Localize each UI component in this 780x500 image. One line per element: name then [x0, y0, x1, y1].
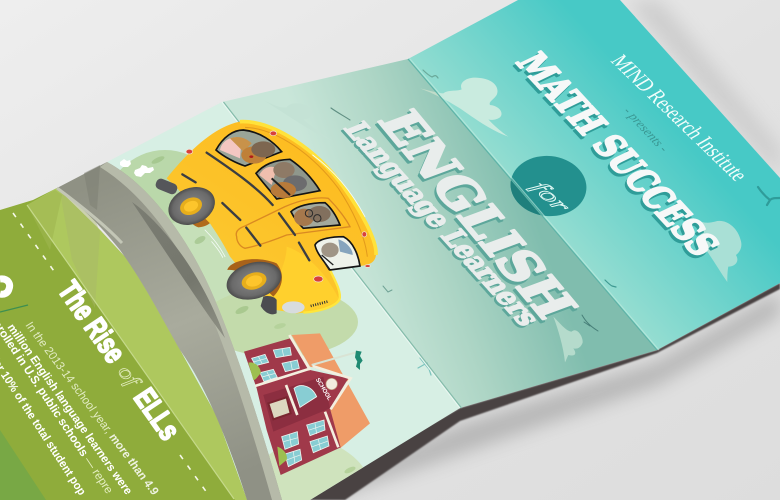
- illustration: school bus: [154, 122, 376, 314]
- motion lines: [205, 155, 365, 257]
- subheading shadow: Language Learners: [334, 120, 545, 332]
- large numeral fragment: [0, 279, 10, 294]
- green lower-left tone: [0, 430, 46, 500]
- school clock: [326, 378, 337, 390]
- school windows: [252, 347, 329, 467]
- fold lines: [222, 59, 659, 408]
- window 3: [291, 203, 340, 228]
- panel: green inside page: [0, 182, 247, 500]
- red lights: [186, 131, 370, 282]
- badge shaded part: [510, 180, 541, 216]
- white flowers: [120, 159, 154, 177]
- green light band: [27, 188, 247, 500]
- headlight: [282, 301, 305, 313]
- rule: [0, 305, 28, 312]
- subheading: Language Learners: [334, 118, 547, 332]
- top rim highlight: [240, 122, 376, 255]
- panel background: [107, 102, 460, 500]
- fold line: [27, 205, 234, 499]
- road: [57, 162, 282, 500]
- panel: left cover scene: [103, 102, 460, 500]
- hills: [120, 150, 364, 500]
- hood highlight: [267, 247, 339, 313]
- window 2: [256, 159, 320, 199]
- birds: [331, 70, 780, 375]
- paper shadow: [300, 0, 780, 495]
- paragraph: [0, 313, 161, 498]
- heading: MATH SUCCESS: [504, 47, 728, 265]
- circle badge: for: [510, 156, 586, 216]
- school trim: [255, 335, 351, 447]
- heading part: of: of: [113, 360, 147, 393]
- panel: middle title panel: [222, 59, 657, 408]
- school sign: SCHOOL: [314, 377, 332, 402]
- school bushes: [248, 362, 287, 466]
- road outer kerb: [100, 162, 282, 500]
- rear wheel: [163, 180, 221, 232]
- heading face: ENGLISH: [366, 103, 589, 325]
- road inner highlight: [57, 188, 122, 243]
- road surface: [57, 162, 282, 500]
- heading shadow: ENGLISH: [364, 106, 587, 328]
- grille: [311, 301, 329, 306]
- rear wheel arch: [180, 189, 217, 227]
- windshield: [315, 237, 360, 270]
- front wheel arch: [227, 259, 282, 297]
- heading part: The Rise: The Rise: [51, 275, 132, 369]
- line 1: In the 2013-14 school year, more than 4.9: [22, 320, 161, 497]
- cloud: fold shadowed part: [420, 88, 440, 97]
- side slats: [182, 153, 309, 260]
- road reflection stripes: [60, 182, 100, 308]
- text: presents: - presents -: [620, 105, 672, 154]
- cloud: lower middle: [553, 317, 583, 362]
- school window grids: [253, 349, 328, 463]
- school door: [268, 397, 291, 419]
- heading shadow: MATH SUCCESS: [504, 50, 726, 265]
- door outline: [236, 198, 350, 248]
- school flag: [312, 351, 363, 370]
- heading: MIND Research Institute: MIND Research Institute: [605, 52, 753, 185]
- badge disc: [508, 152, 589, 220]
- panel: right title panel: [408, 0, 780, 350]
- heading part: ELLs: ELLs: [127, 383, 187, 446]
- bus body: [167, 122, 376, 313]
- heading: The Rise of ELLs: [51, 275, 187, 446]
- line 2: million English language learners were: [4, 322, 134, 497]
- school lower band: [263, 377, 330, 432]
- badge script: for: [525, 179, 576, 216]
- heading face: MATH SUCCESS: [506, 47, 728, 262]
- road crescent: [132, 202, 225, 338]
- window 1: [216, 130, 282, 166]
- school roof: [292, 333, 370, 448]
- front wheel: [222, 256, 286, 306]
- road shaded stripe: [84, 165, 100, 210]
- illustration: school: [244, 333, 370, 475]
- roof trim: [245, 127, 367, 257]
- front bumper: [261, 296, 277, 314]
- heading: ENGLISH: [364, 103, 589, 328]
- cloud: middle panel top: [263, 100, 332, 141]
- dashed road line: [13, 213, 210, 497]
- paper thickness edge: [300, 283, 780, 500]
- subheading face: Language Learners: [336, 118, 547, 330]
- school brick front: [244, 338, 348, 475]
- cloud: upper fold: [438, 78, 508, 136]
- cloud: right: [697, 220, 741, 282]
- rear bumper: [154, 177, 179, 196]
- green base: [0, 188, 247, 500]
